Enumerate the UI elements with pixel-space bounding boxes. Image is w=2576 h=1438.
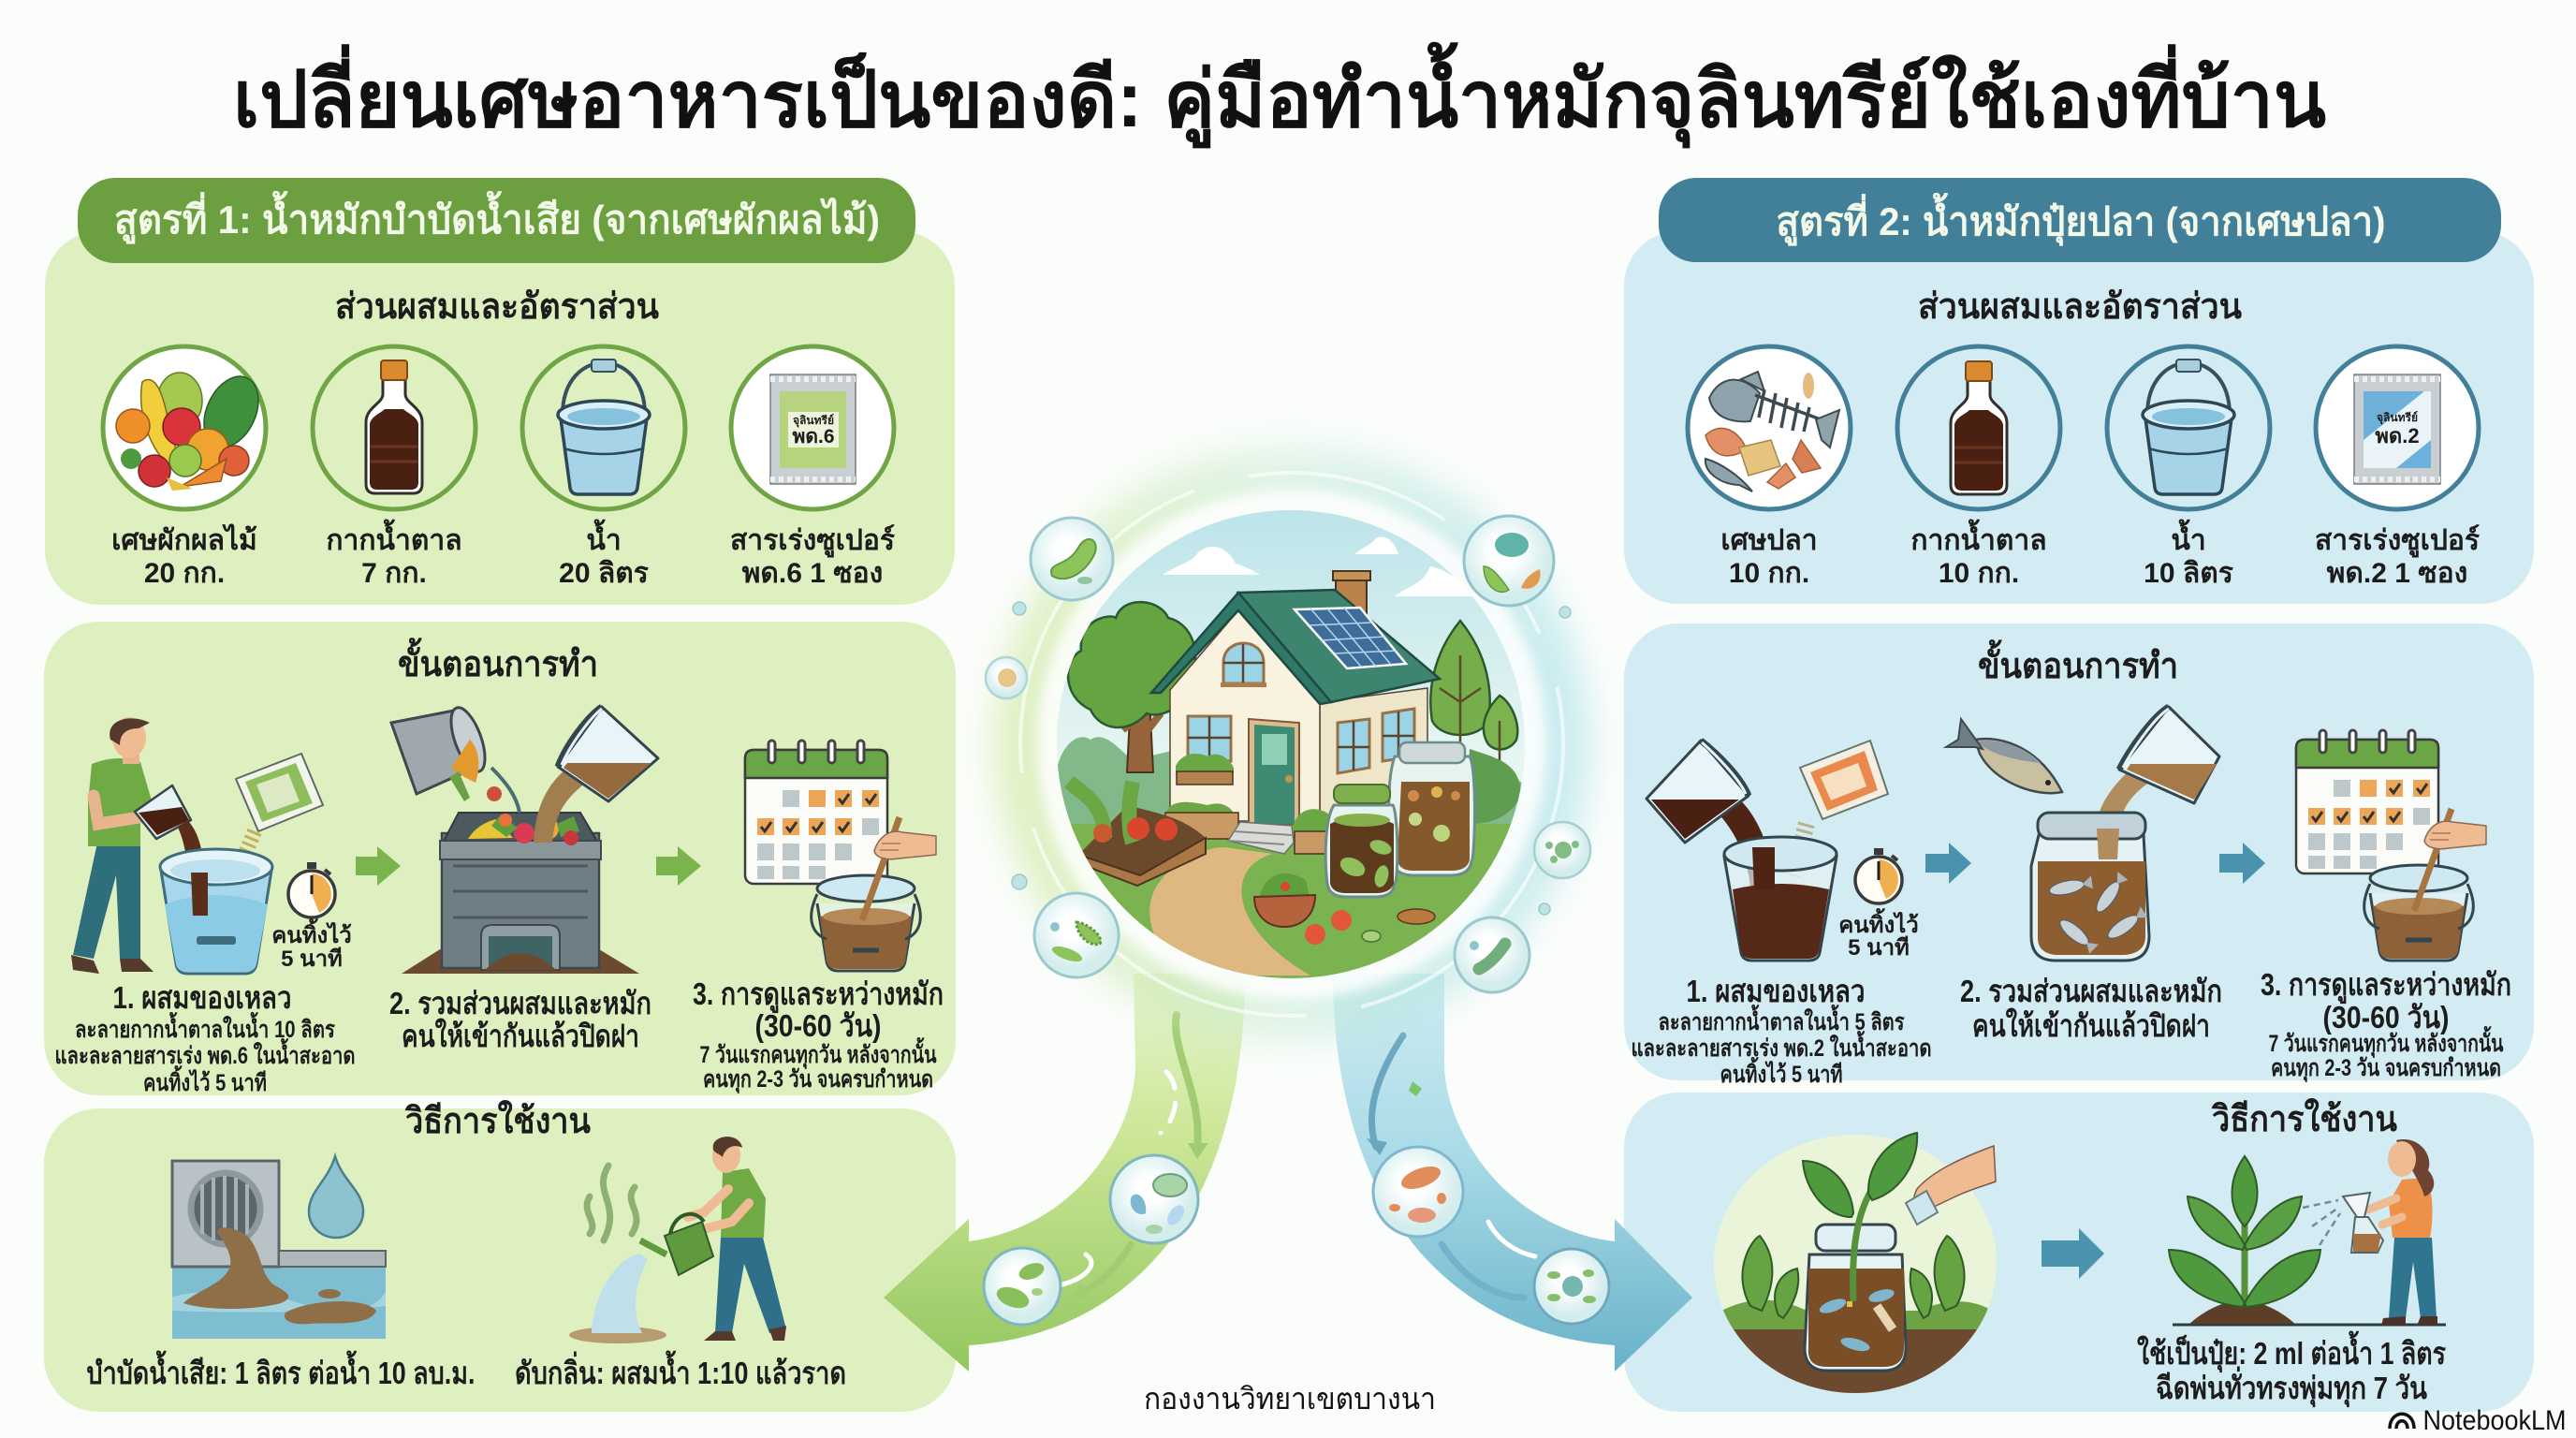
- illustration: jar fertilising plants: [1713, 1133, 1999, 1395]
- label: stir and wait: 5 นาที: [281, 946, 343, 972]
- attic window: [1221, 643, 1266, 687]
- ingredient labels: 20 ลิตร: [559, 558, 649, 589]
- illustration: bucket stirring: [2364, 865, 2473, 961]
- illustration: bucket with dark liquid: [1724, 837, 1837, 961]
- usage label: [2137, 1330, 2446, 1408]
- flow accents: [1062, 1015, 1535, 1298]
- recipe 2 banner: [1659, 178, 2501, 262]
- arrow: [356, 846, 401, 886]
- label: stir and wait: คนทิ้งไว้: [271, 917, 352, 948]
- arrow: [656, 846, 701, 886]
- flow bubble: green 1: [1110, 1155, 1198, 1243]
- illustration: odor steam: [587, 1166, 637, 1240]
- flow bubble: teal cluster: [1534, 1249, 1609, 1324]
- ingredient labels: [1720, 519, 2480, 589]
- arrow: [2042, 1228, 2104, 1279]
- ingredient labels: 20 กก.: [144, 558, 225, 589]
- step 2 text: [389, 986, 651, 1053]
- illustration: stick and hand: [862, 817, 936, 920]
- microbe bubble: green rod: [1455, 917, 1530, 992]
- illustration: packet: [1793, 741, 1888, 875]
- icon: molasses bottle: [1951, 361, 2007, 494]
- icon: water bucket: [2143, 360, 2234, 494]
- ingredient labels: กากน้ำตาล: [1910, 519, 2047, 556]
- heading: steps: ขั้นตอนการทำ: [398, 638, 598, 684]
- label: stir and wait: [271, 917, 352, 972]
- panel: recipe 2 steps: [1624, 624, 2534, 1088]
- step 3 text: คนทุก 2-3 วัน จนครบกำหนด: [2271, 1055, 2501, 1083]
- illustration: jug pouring liquid: [534, 707, 658, 843]
- label: stir and wait: 5 นาที: [1848, 935, 1910, 961]
- step 3 text: [693, 976, 944, 1094]
- ingredient labels: สารเร่งซูเปอร์: [730, 524, 895, 558]
- raised garden bed: [1069, 782, 1206, 886]
- left tree: [1068, 602, 1195, 772]
- ingredient labels: 10 กก.: [1939, 558, 2019, 589]
- heading: ingredients: ส่วนผสมและอัตราส่วน: [1918, 287, 2242, 327]
- label: stir and wait: [1838, 907, 1919, 961]
- ingredient labels: น้ำ: [2171, 519, 2206, 556]
- step 1 text: คนทิ้งไว้ 5 นาที: [1720, 1056, 1842, 1088]
- step 3 text: 3. การดูแลระหว่างหมัก: [693, 976, 944, 1014]
- ingredient labels: พด.6 1 ซอง: [742, 558, 883, 589]
- microbe bubble: green bacillus: [1031, 518, 1113, 600]
- ingredient labels: สารเร่งซูเปอร์: [2315, 524, 2480, 558]
- arrow: green flow to recipe 1 usage: [884, 974, 1245, 1372]
- circles: other ingredients: [313, 346, 685, 509]
- icon: accelerator packet: พด.6: [792, 426, 835, 448]
- microbe bubble: cluster: [1534, 822, 1590, 878]
- step 1 text: [1631, 974, 1932, 1088]
- panel: recipe 2 ingredients: [1624, 178, 2534, 604]
- recipe 1 banner: [78, 178, 915, 263]
- heading: steps: ขั้นตอนการทำ: [1978, 639, 2178, 686]
- side wall: [1320, 688, 1427, 821]
- illustration: stick and hand: [2414, 809, 2486, 911]
- panel: recipe 2 usage: [1624, 1093, 2534, 1412]
- floating droplets: [1012, 602, 1571, 915]
- usage labels: บำบัดน้ำเสีย: 1 ลิตร ต่อน้ำ 10 ลบ.ม.: [86, 1350, 476, 1390]
- usage labels: ดับกลิ่น: ผสมน้ำ 1:10 แล้วราด: [515, 1350, 846, 1390]
- panel: recipe 1 steps: [44, 622, 956, 1096]
- far bushes: [1058, 737, 1522, 850]
- icon: accelerator packet: [731, 346, 894, 509]
- illustration: bucket stirring: [812, 875, 920, 971]
- illustration: packet and pour: [178, 754, 323, 917]
- flow arrowheads: [1072, 1081, 1422, 1299]
- door: [1249, 719, 1299, 824]
- icon: accelerator packet: [2316, 346, 2479, 509]
- illustration: drain into water: [172, 1161, 386, 1339]
- icon: accelerator packet: พด.2: [2375, 424, 2420, 448]
- step 3 text: 3. การดูแลระหว่างหมัก: [2261, 967, 2511, 1005]
- illustration: jar with fish: [2031, 813, 2149, 961]
- icon: stopwatch: [288, 862, 335, 917]
- panel: recipe 1 usage: [44, 1100, 956, 1412]
- illustration: compost bin: [402, 813, 639, 974]
- illustration: person pouring: [71, 717, 191, 974]
- icon: fish scraps: [1688, 346, 1851, 509]
- solar panel: [1295, 608, 1406, 668]
- step 2 text: [1960, 974, 2222, 1043]
- icon: accelerator packet: จุลินทรีย์: [2377, 411, 2418, 425]
- title: เปลี่ยนเศษอาหารเป็นของดี: คู่มือทำน้ำหมักจุลินทรีย์ใช้เองที่บ้าน: [233, 41, 2326, 149]
- ingredient labels: เศษปลา: [1720, 525, 1818, 556]
- illustration: tipped bucket: [391, 703, 520, 827]
- heading: usage: วิธีการใช้งาน: [2211, 1098, 2397, 1139]
- ingredient labels: 10 ลิตร: [2144, 558, 2233, 589]
- garden path: [1149, 847, 1310, 976]
- step 2 text: 2. รวมส่วนผสมและหมัก: [389, 986, 651, 1020]
- recipe 2 banner: สูตรที่ 2: น้ำหมักปุ๋ยปลา (จากเศษปลา): [1777, 192, 2385, 246]
- step 3 text: 7 วันแรกคนทุกวัน หลังจากนั้น: [700, 1036, 936, 1070]
- arrow: [2219, 843, 2265, 884]
- microbe bubble: spiky green: [1034, 893, 1119, 977]
- ingredient labels: 7 กก.: [361, 558, 427, 589]
- ingredient labels: กากน้ำตาล: [326, 519, 462, 556]
- step 1 text: ละลายกากน้ำตาลในน้ำ 10 ลิตร: [75, 1011, 335, 1043]
- step 3 text: (30-60 วัน): [754, 1008, 882, 1043]
- illustration: bucket of water: [160, 849, 272, 974]
- step 3 text: (30-60 วัน): [2323, 1000, 2449, 1034]
- usage labels: [86, 1350, 846, 1390]
- panel: recipe 1 ingredients: [45, 178, 955, 605]
- illustration: plant: [2169, 1156, 2446, 1325]
- ingredient labels: พด.2 1 ซอง: [2327, 558, 2467, 589]
- icon: stopwatch: [1855, 848, 1902, 903]
- heading: usage: วิธีการใช้งาน: [404, 1100, 591, 1141]
- windows: [1176, 709, 1414, 785]
- label: stir and wait: คนทิ้งไว้: [1838, 907, 1919, 938]
- microbe bubble: teal and orange: [1464, 516, 1554, 606]
- flow bubble: green 2: [984, 1248, 1061, 1325]
- jars of fermentation: [1325, 742, 1475, 897]
- ingredient labels: น้ำ: [586, 519, 622, 556]
- usage label: ฉีดพ่นทั่วทรงพุ่มทุก 7 วัน: [2156, 1366, 2427, 1408]
- microbe bubble: small tan: [986, 657, 1027, 698]
- arrow: [1925, 843, 1971, 884]
- illustration: calendar: [2296, 730, 2438, 873]
- step 2 text: 2. รวมส่วนผสมและหมัก: [1960, 974, 2222, 1008]
- icon: vegetables and fruit: [103, 346, 269, 509]
- ingredient labels: [111, 519, 895, 589]
- ground: [1056, 824, 1528, 983]
- step 3 text: คนทุก 2-3 วัน จนครบกำหนด: [703, 1066, 933, 1094]
- flow bubble: orange microbes: [1373, 1147, 1463, 1237]
- bowl and produce: [1254, 873, 1435, 945]
- front wall: [1170, 610, 1320, 821]
- recipe 1 banner: สูตรที่ 1: น้ำหมักบำบัดน้ำเสีย (จากเศษผักผลไม้): [114, 190, 880, 244]
- central illustration: home garden: [1048, 506, 1535, 983]
- icon: molasses bottle: [366, 360, 422, 493]
- step 1 text: ละลายกากน้ำตาลในน้ำ 5 ลิตร: [1659, 1004, 1905, 1035]
- step 3 text: [2261, 967, 2511, 1083]
- step 1 text: [54, 980, 356, 1096]
- ingredient labels: 10 กก.: [1729, 558, 1809, 589]
- icon: accelerator packet: จุลินทรีย์: [793, 414, 834, 428]
- step 1 text: และละลายสารเร่ง พด.6 ในน้ำสะอาด: [54, 1037, 356, 1069]
- footer: organization: กองงานวิทยาเขตบางนา: [1144, 1382, 1436, 1416]
- step 1 text: 1. ผสมของเหลว: [112, 980, 292, 1015]
- illustration: woman spraying: [2303, 1139, 2437, 1326]
- step 1 text: คนทิ้งไว้ 5 นาที: [143, 1064, 267, 1096]
- illustration: person with watering can: [569, 1137, 786, 1343]
- arrow: blue flow to recipe 2 usage: [1333, 974, 1692, 1372]
- illustration: calendar: [745, 741, 887, 884]
- illustration: jug pouring: [2097, 707, 2219, 829]
- icon: water bucket: [558, 360, 650, 494]
- step 2 text: คนให้เข้ากันแล้วปิดฝา: [402, 1018, 639, 1053]
- heading: ingredients: ส่วนผสมและอัตราส่วน: [335, 287, 659, 327]
- step 2 text: คนให้เข้ากันแล้วปิดฝา: [1972, 1007, 2210, 1043]
- usage label: ใช้เป็นปุ๋ย: 2 ml ต่อน้ำ 1 ลิตร: [2137, 1330, 2446, 1373]
- central glow: [994, 447, 1589, 1042]
- step 1 text: และละลายสารเร่ง พด.2 ในน้ำสะอาด: [1631, 1030, 1932, 1062]
- clouds: [1163, 537, 1479, 596]
- step 3 text: 7 วันแรกคนทุกวัน หลังจากนั้น: [2269, 1025, 2503, 1059]
- right trees: [1430, 621, 1521, 824]
- circles: other ingredients: [1897, 346, 2270, 509]
- illustration: fish: [1946, 719, 2062, 793]
- illustration: cup pouring molasses: [1647, 741, 1775, 889]
- roof: [1238, 590, 1440, 702]
- step 1 text: 1. ผสมของเหลว: [1687, 974, 1865, 1008]
- planters and steps: [1165, 802, 1332, 854]
- ingredient labels: เศษผักผลไม้: [111, 523, 257, 556]
- icon: water drop: [309, 1156, 363, 1238]
- chimney: [1333, 571, 1370, 617]
